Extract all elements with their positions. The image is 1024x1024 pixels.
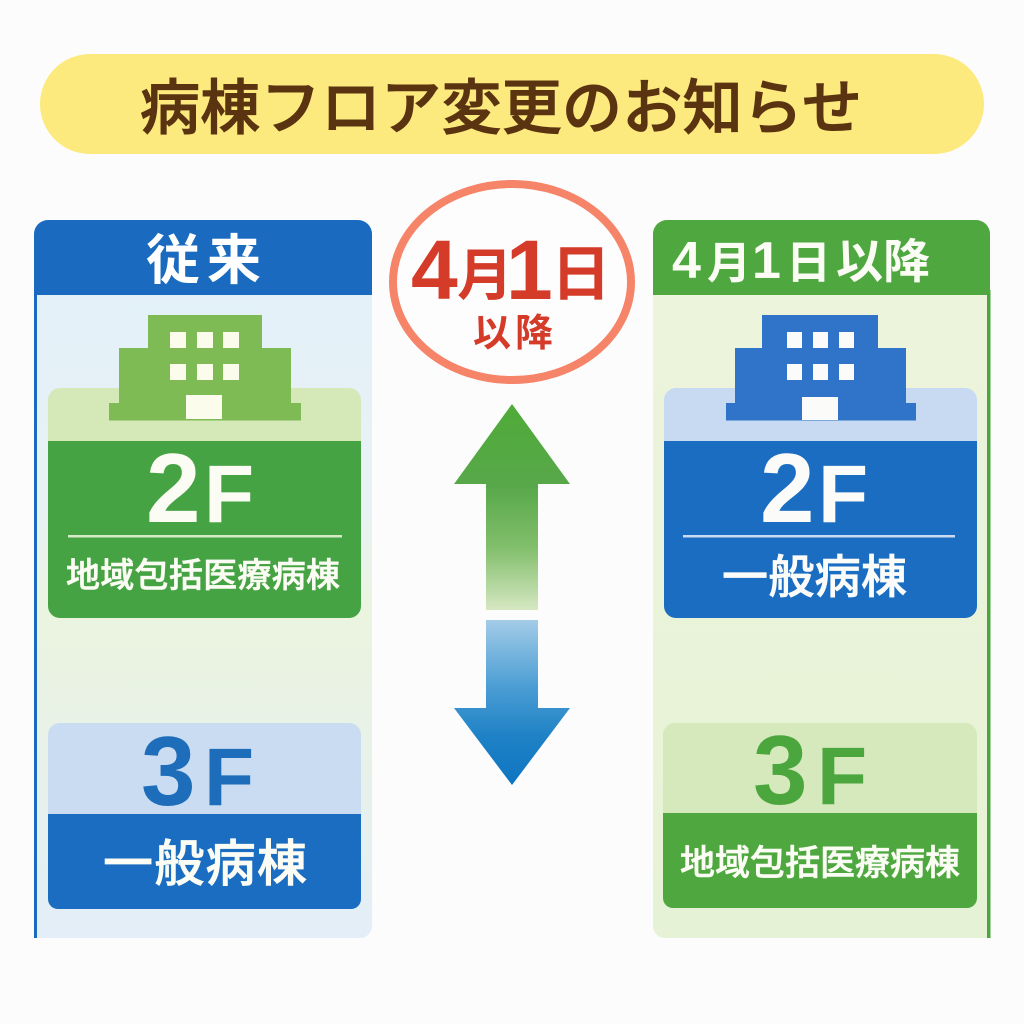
- 3F card: [663, 715, 977, 908]
- 2F card: [48, 388, 361, 618]
- panel heading: 月: [707, 227, 751, 291]
- ward name: 地域包括医療病棟: [680, 835, 960, 886]
- floor number: 2: [146, 433, 201, 543]
- icon: green building: [109, 315, 301, 420]
- panel heading: 以降: [836, 223, 930, 292]
- date text: 月: [457, 231, 513, 312]
- icon: blue building: [726, 315, 916, 420]
- arrow: down blue: [454, 620, 570, 785]
- date text: 日: [551, 226, 611, 313]
- date suffix: 以降: [473, 302, 553, 357]
- panel heading: 4: [672, 232, 701, 290]
- floor number: F: [204, 449, 254, 540]
- date text: 4: [411, 223, 458, 317]
- 2F card: [664, 388, 977, 618]
- title text: 病棟フロア変更のお知らせ: [140, 60, 862, 147]
- ward name: 地域包括医療病棟: [66, 548, 340, 597]
- floor number: F: [818, 449, 868, 540]
- ward name: 一般病棟: [103, 824, 307, 896]
- panel heading: 1: [752, 232, 781, 290]
- title banner: [40, 54, 984, 154]
- floor number: 3: [753, 715, 808, 825]
- floor number: 3: [141, 716, 196, 826]
- floor number: F: [817, 731, 867, 822]
- ward name: 一般病棟: [722, 541, 907, 607]
- date badge: [393, 184, 631, 380]
- panel: after (4月1日以降): [653, 220, 990, 938]
- 3F card: [48, 716, 361, 909]
- panel: before (従来): [34, 216, 372, 938]
- panel heading: 従来: [146, 216, 261, 295]
- arrow: up green: [454, 404, 570, 610]
- panel heading: 日: [786, 226, 831, 291]
- floor number: 2: [760, 433, 815, 543]
- date text: 1: [506, 223, 553, 317]
- floor number: F: [204, 732, 254, 823]
